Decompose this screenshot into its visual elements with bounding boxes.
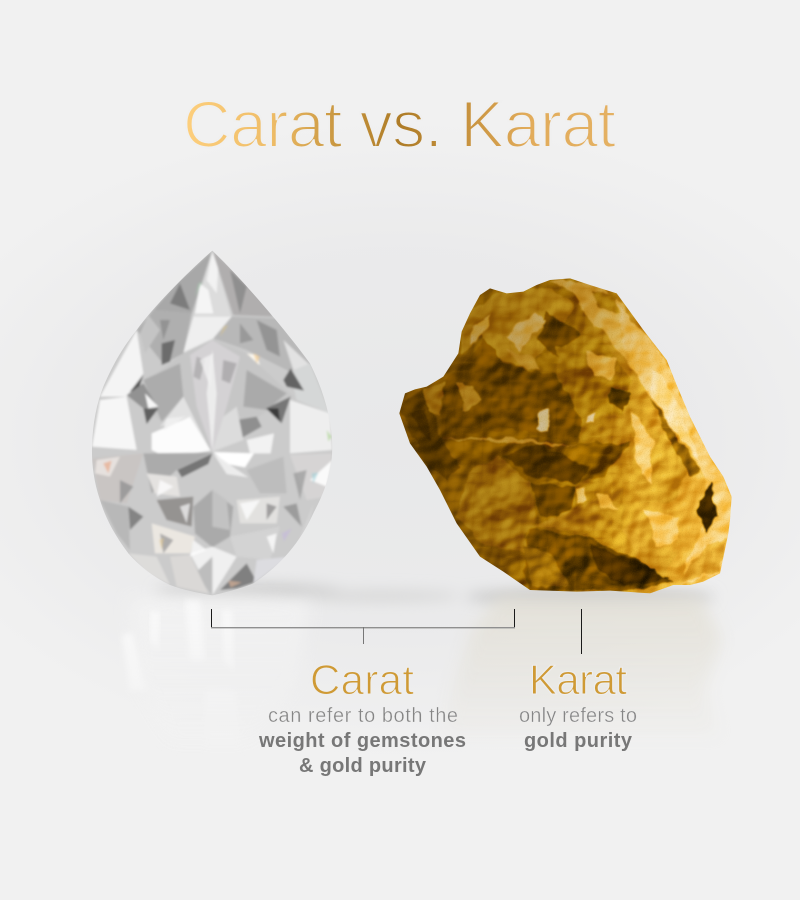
side facets [92, 397, 332, 555]
nugget warm tint [454, 280, 727, 592]
reflection: diamond [127, 589, 302, 654]
pointer: karat [581, 609, 582, 654]
karat emphasis: gold purity [524, 730, 633, 752]
floor shadows [155, 584, 715, 605]
heading: karat: Karat [529, 656, 627, 703]
icon: gold nugget [390, 270, 740, 603]
nugget grain texture [416, 282, 732, 592]
text block: carat [258, 656, 466, 777]
title: Carat vs. Karat [183, 87, 616, 161]
table facets [144, 342, 287, 468]
diamond base [92, 250, 332, 596]
carat description: can refer to both the [268, 705, 458, 727]
text block: karat [519, 656, 637, 752]
rainbow sparkle facets [103, 282, 332, 587]
crown facets [100, 251, 330, 413]
dark accent facets [127, 368, 304, 424]
carat emphasis line 1: weight of gemstones [258, 730, 466, 752]
pavilion facets [128, 453, 290, 595]
nugget shading [400, 278, 658, 590]
bracket: carat [211, 609, 515, 644]
nugget base [400, 278, 730, 594]
nugget metallic relief [400, 278, 732, 593]
nugget crumpled facets [400, 280, 733, 592]
carat emphasis line 2: & gold purity [299, 755, 427, 777]
reflection: gold nugget [462, 596, 720, 709]
icon: pear-cut diamond [92, 250, 332, 596]
karat description: only refers to [519, 705, 637, 727]
fine facet streaks [120, 320, 307, 557]
heading: carat: Carat [310, 656, 414, 703]
